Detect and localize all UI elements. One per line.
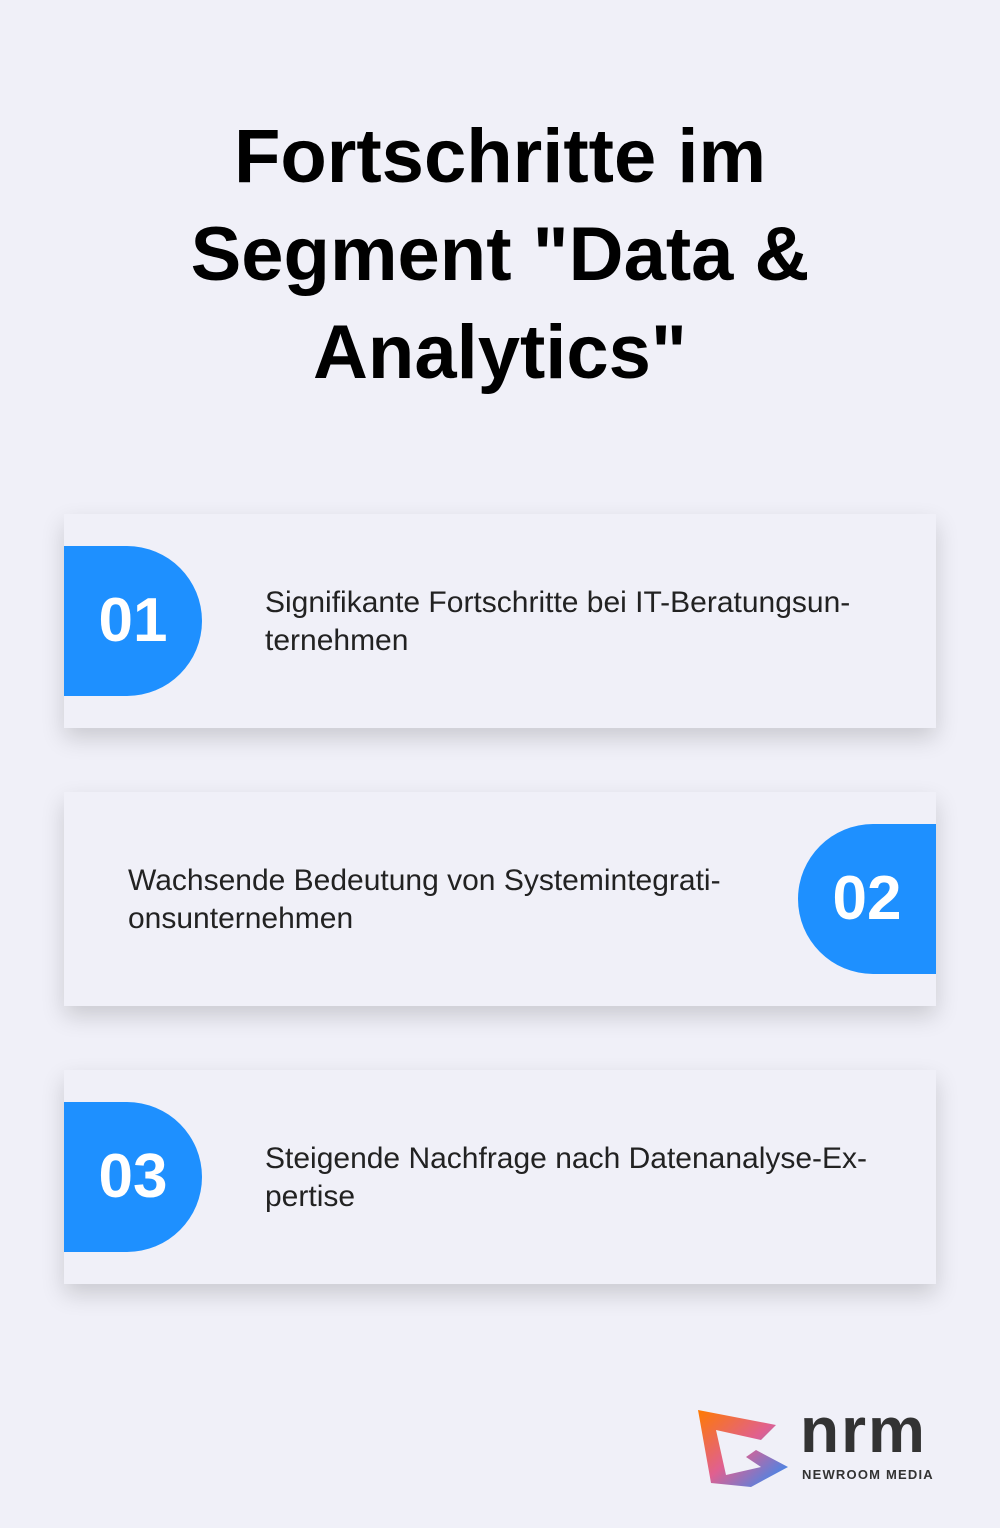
text 1: Signifikante Fortschritte bei IT-Beratungsun-	[265, 586, 850, 619]
logo text: nrm	[800, 1394, 927, 1466]
text 2: onsunternehmen	[128, 902, 353, 935]
badge 02: 02	[833, 864, 901, 933]
badge 02	[798, 824, 936, 974]
badge 03: 03	[99, 1142, 167, 1211]
title: Analytics"	[313, 310, 687, 395]
title: Segment "Data &	[191, 212, 809, 297]
card 1	[64, 514, 936, 728]
title	[191, 114, 809, 395]
badge 01: 01	[99, 586, 167, 655]
text 2: Wachsende Bedeutung von Systemintegrati-	[128, 864, 721, 897]
logo	[698, 1394, 934, 1487]
badge 03	[64, 1102, 202, 1252]
text 3: pertise	[265, 1180, 355, 1213]
text 3	[265, 1142, 867, 1213]
logo icon	[698, 1410, 788, 1487]
text 2	[128, 864, 721, 935]
card 3	[64, 1070, 936, 1284]
badge 01	[64, 546, 202, 696]
text 3: Steigende Nachfrage nach Datenanalyse-Ex-	[265, 1142, 867, 1175]
card 2	[64, 792, 936, 1006]
text 1: ternehmen	[265, 624, 408, 657]
logo: NEWROOM MEDIA	[802, 1467, 934, 1482]
text 1	[265, 586, 850, 657]
title: Fortschritte im	[234, 114, 766, 199]
